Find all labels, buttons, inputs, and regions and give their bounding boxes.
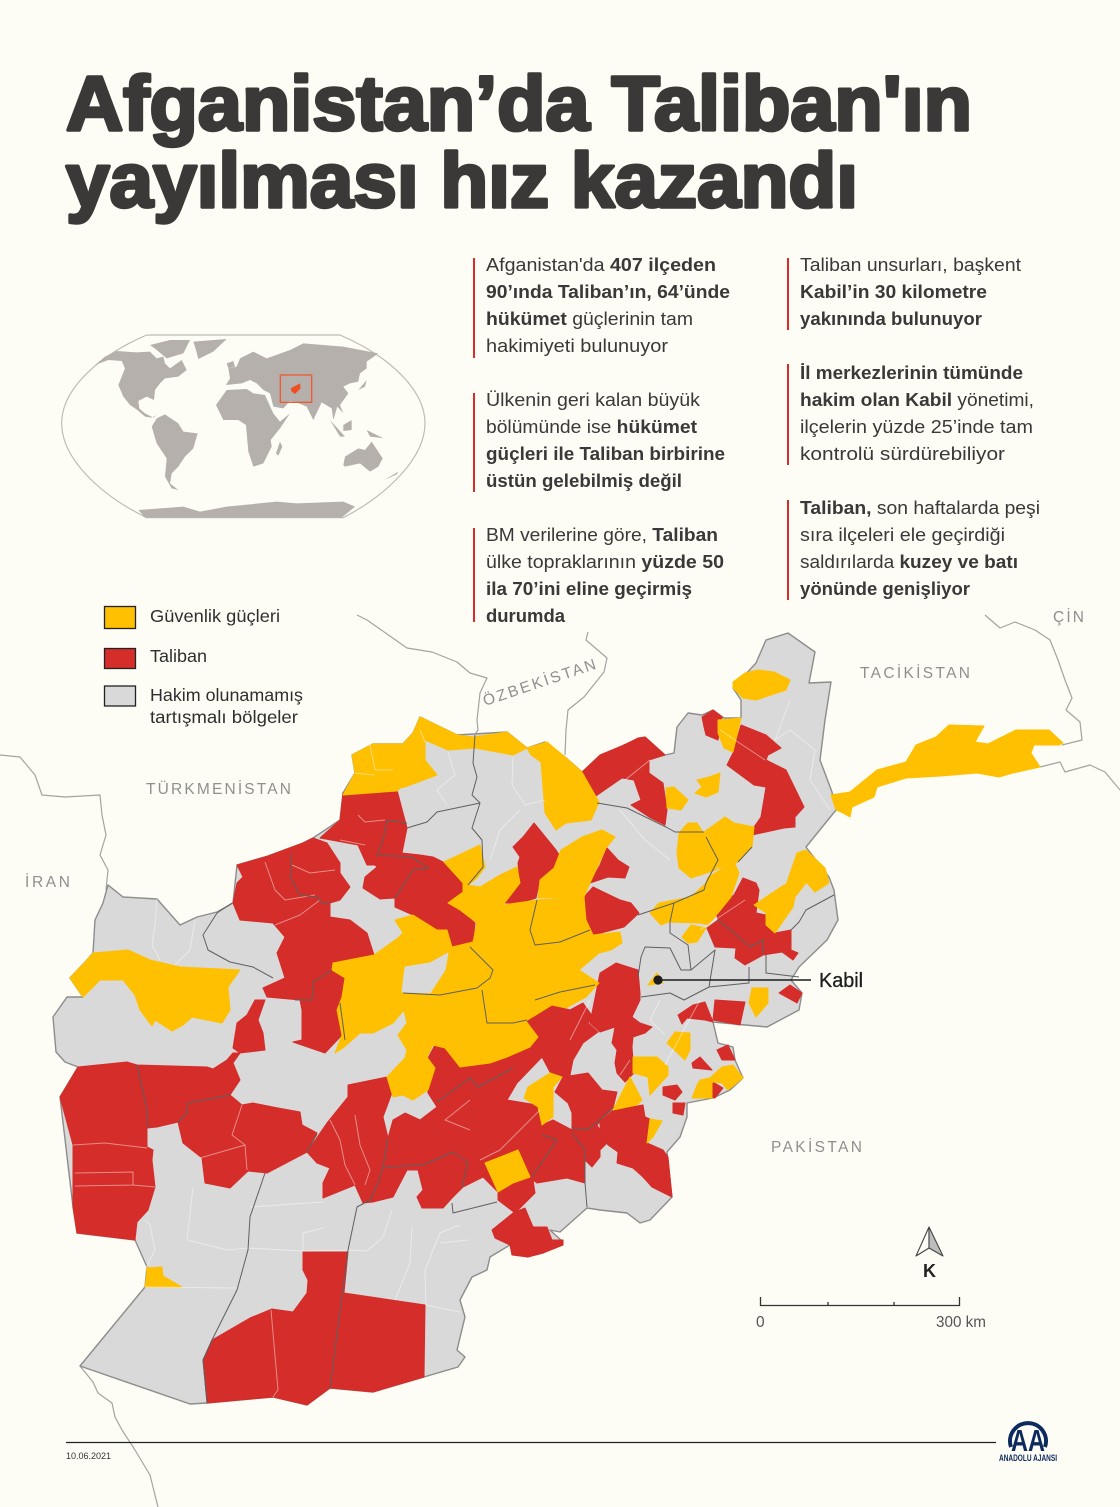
text column 1: ila 70’ini eline geçirmiş (486, 578, 692, 599)
legend: contested (104, 685, 303, 727)
logo: Anadolu Ajansı: ANADOLU AJANSI (999, 1453, 1057, 1463)
legend: security forces (104, 606, 280, 628)
text column 1: Afganistan'da 407 ilçeden (486, 254, 716, 275)
date: 10.06.2021 (66, 1451, 111, 1461)
logo: Anadolu Ajansı: AA (1011, 1423, 1045, 1458)
locator world map (62, 335, 425, 518)
scale bar (756, 1297, 986, 1331)
text column 1: güçleri ile Taliban birbirine (486, 443, 725, 464)
red rule block 5 (787, 364, 789, 465)
red rule block 3 (473, 528, 475, 622)
map of Afghanistan (53, 633, 1063, 1405)
red rule block 2 (473, 393, 475, 492)
label: Kabil with leader line: Kabil (819, 970, 863, 992)
legend: Taliban: Taliban (150, 646, 207, 666)
text column 2: saldırılarda kuzey ve batı (800, 551, 1018, 572)
country labels: TÜRKMENİSTAN (146, 780, 291, 798)
north arrow (916, 1227, 943, 1281)
legend: contested: Hakim olunamamış (150, 685, 303, 705)
text column 2: Kabil’in 30 kilometre (800, 281, 987, 302)
legend: contested: tartışmalı bölgeler (150, 707, 298, 727)
text column 2: yakınında bulunuyor (800, 308, 982, 329)
footer rule (66, 1442, 996, 1444)
red rule block 4 (787, 258, 789, 330)
title: Afganistan’da Taliban'ın (66, 61, 972, 147)
text column 2: sıra ilçeleri ele geçirdiği (800, 524, 1005, 545)
text column 1: hakimiyeti bulunuyor (486, 335, 668, 356)
text column 1: hükümet güçlerinin tam (486, 308, 693, 329)
country labels (25, 608, 1084, 1156)
title (66, 61, 972, 224)
country labels: ÇİN (1053, 608, 1084, 626)
text column 2: hakim olan Kabil yönetimi, (800, 389, 1034, 410)
country labels: TACİKİSTAN (860, 664, 970, 682)
country labels: PAKİSTAN (771, 1138, 862, 1156)
logo: Anadolu Ajansı (999, 1423, 1057, 1463)
text column 1: ülke topraklarının yüzde 50 (486, 551, 724, 572)
label: Kabil with leader line (653, 970, 863, 992)
text column 2: İl merkezlerinin tümünde (800, 362, 1023, 383)
text column 1: üstün gelebilmiş değil (486, 470, 682, 491)
base: contested territory (53, 633, 838, 1405)
text column 1: Ülkenin geri kalan büyük (486, 389, 701, 410)
red rule block 6 (787, 500, 789, 600)
scale bar: 300 km (936, 1314, 986, 1331)
text column 2 (787, 254, 1040, 600)
text column 1: durumda (486, 605, 566, 626)
north arrow: K (923, 1261, 936, 1281)
text column 1: BM verilerine göre, Taliban (486, 524, 718, 545)
country labels: ÖZBEKİSTAN (481, 655, 598, 710)
government-held districts (70, 670, 1063, 1287)
text column 2: Taliban, son haftalarda peşi (800, 497, 1040, 518)
legend: Taliban (104, 646, 207, 668)
text column 2: yönünde genişliyor (800, 578, 970, 599)
text column 2: kontrolü sürdürebiliyor (800, 443, 1005, 464)
neighbouring country borders (0, 615, 1120, 1507)
legend (104, 606, 303, 727)
scale bar: 0 (756, 1314, 765, 1331)
text column 1: bölümünde ise hükümet (486, 416, 697, 437)
contested pockets (402, 953, 448, 993)
Taliban-held districts (60, 710, 804, 1405)
text column 2: ilçelerin yüzde 25’inde tam (800, 416, 1033, 437)
text column 1: 90’ında Taliban’ın, 64’ünde (486, 281, 730, 302)
text column 2: Taliban unsurları, başkent (800, 254, 1021, 275)
province boundaries (137, 735, 834, 1403)
legend: security forces: Güvenlik güçleri (150, 606, 280, 626)
district lines (73, 700, 830, 1397)
red rule block 1 (473, 258, 475, 358)
title: yayılması hız kazandı (66, 138, 858, 224)
country labels: İRAN (25, 873, 70, 891)
text column 1 (473, 254, 730, 626)
